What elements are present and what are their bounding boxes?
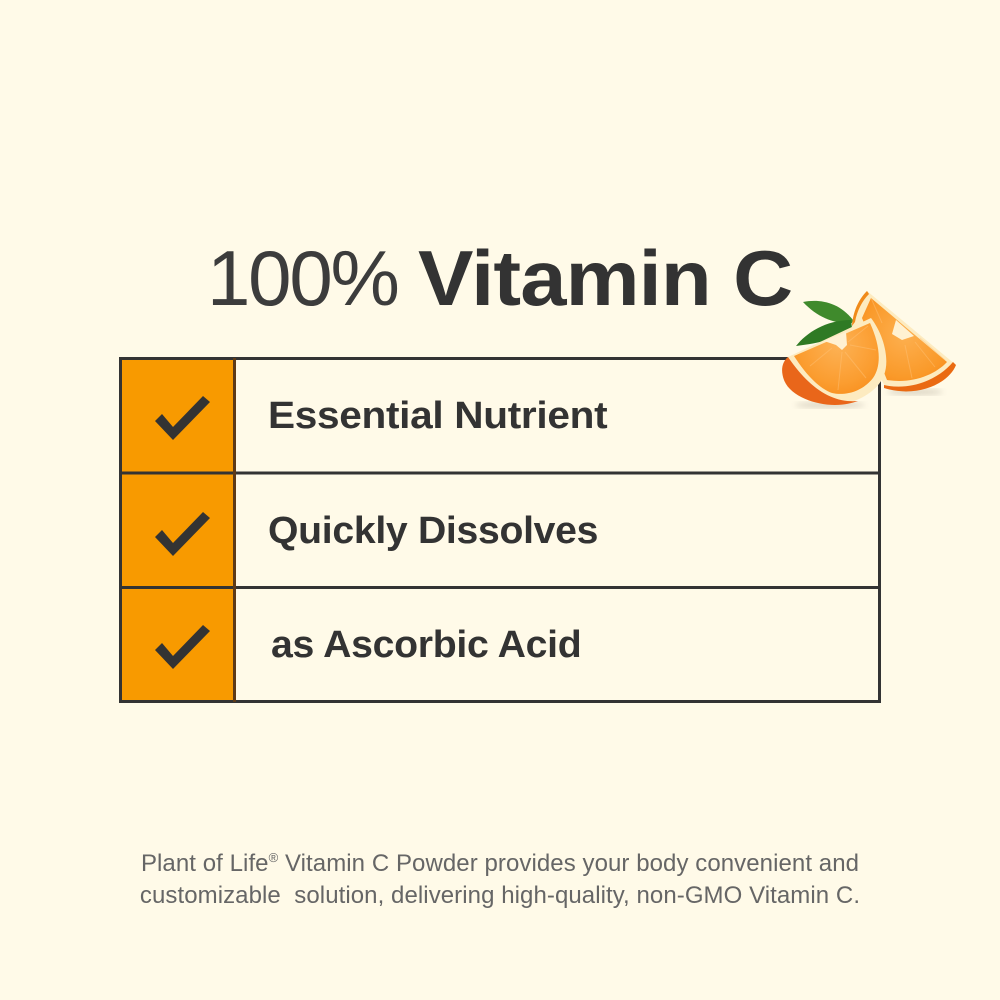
title xyxy=(207,234,792,322)
front wedge xyxy=(782,318,886,405)
icon: check 3 xyxy=(155,625,210,669)
row 3 label: as Ascorbic Acid xyxy=(271,624,581,666)
footer description: customizable solution, delivering high-quality, non-GMO Vitamin C. xyxy=(140,882,860,909)
title: Vitamin C xyxy=(418,234,792,322)
row 1 label: Essential Nutrient xyxy=(268,395,607,437)
leaves xyxy=(803,301,853,323)
title: 100% xyxy=(207,234,398,322)
icon: check 2 xyxy=(155,512,210,556)
footer description: Plant of Life® Vitamin C Powder provides your body convenient and xyxy=(141,850,859,877)
footer description xyxy=(140,850,860,909)
row 2 label: Quickly Dissolves xyxy=(268,510,598,552)
icon: check 1 xyxy=(155,396,210,440)
back wedge xyxy=(852,291,956,391)
